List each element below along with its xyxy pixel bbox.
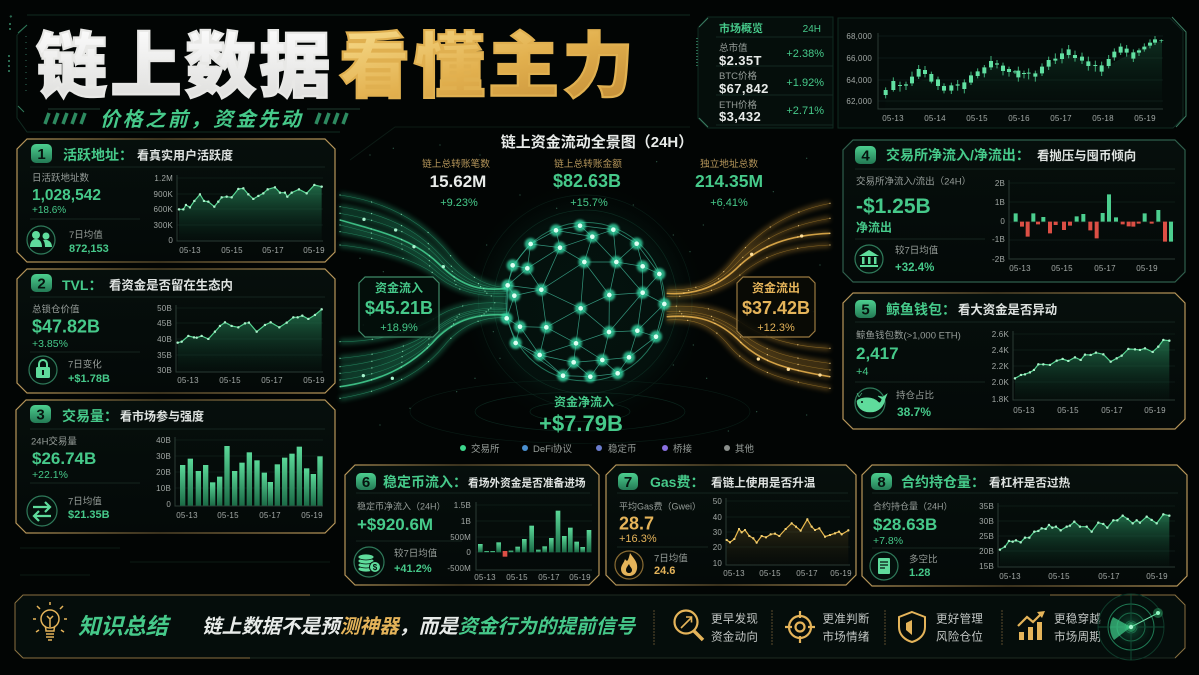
heading 6: 看场外资金是否准备进场 <box>468 476 586 490</box>
benefit 1 text <box>711 612 758 644</box>
candlestick axis labels: 66,000 <box>846 54 872 63</box>
callout: capital inflow <box>359 277 439 337</box>
line chart: daily active addresses: 05-19 <box>303 246 325 255</box>
bar chart: stablecoin flow: 05-15 <box>506 573 528 582</box>
7-day change 2: 7日变化 <box>68 358 102 370</box>
candlestick axis labels: 64,000 <box>846 76 872 85</box>
heading 5 <box>855 300 1057 318</box>
line chart: open interest: 05-15 <box>1048 572 1070 581</box>
net inflow <box>539 394 623 436</box>
line chart: open interest: 05-13 <box>999 572 1021 581</box>
7-day average 1: 872,153 <box>69 243 109 255</box>
icon: light bulb <box>33 602 67 640</box>
benefit 3 text: 风险仓位 <box>936 630 983 644</box>
7-day comparison 6: +41.2% <box>394 563 432 575</box>
main metric 5 <box>856 330 961 378</box>
title: 链上数据 <box>36 28 334 107</box>
heading 2 <box>31 274 233 293</box>
legend: 交易所 <box>471 443 500 455</box>
line chart: daily active addresses: 0 <box>168 236 173 245</box>
legend <box>460 443 754 455</box>
benefit 2 text: 更准判断 <box>822 612 870 626</box>
long-short ratio 8 <box>909 554 938 579</box>
main metric 8: $28.63B <box>873 515 937 534</box>
icon: bank <box>855 245 883 273</box>
holding share 5: 持仓占比 <box>896 390 934 402</box>
panel 4: exchange net flow <box>843 140 1185 282</box>
line chart: daily active addresses: 05-17 <box>262 246 284 255</box>
stat: total transfers: +9.23% <box>440 197 478 209</box>
line chart: open interest: 05-17 <box>1098 572 1120 581</box>
line chart: open interest: 35B <box>979 502 994 511</box>
line chart: whale wallets: 05-19 <box>1144 406 1166 415</box>
market overview heading <box>719 21 821 35</box>
7-day average 7 <box>654 552 688 577</box>
bar chart: stablecoin flow: 05-19 <box>569 573 591 582</box>
7-day comparison 4: +32.4% <box>895 262 934 274</box>
bar chart: exchange net flow: 05-19 <box>1136 264 1158 273</box>
candlestick axis labels: 05-15 <box>966 114 988 123</box>
candlestick axis labels: 05-18 <box>1092 114 1114 123</box>
main metric 7: +16.3% <box>619 533 657 545</box>
line chart: whale wallets: 2.2K <box>992 362 1009 371</box>
bar chart: stablecoin flow: 1B <box>461 517 471 526</box>
candlestick axis labels: 05-17 <box>1050 114 1072 123</box>
line chart: daily active addresses <box>154 174 325 255</box>
bar chart: stablecoin flow: 05-13 <box>474 573 496 582</box>
icon: flame <box>615 551 643 579</box>
7-day average 3: 7日均值 <box>68 496 102 508</box>
icon: users <box>27 226 55 254</box>
panel 2: TVL <box>17 269 335 393</box>
stat: total transfer value: 链上总转账金额 <box>554 157 622 170</box>
heading 3: 交易量： <box>62 408 118 424</box>
heading 3 <box>30 405 204 424</box>
stat: total market cap <box>719 42 824 68</box>
heading 5: 5 <box>861 302 870 318</box>
stat: unique addresses <box>695 157 763 209</box>
summary sentence: 链上数据不是预测神器，而是资金行为的提前信号 <box>202 616 636 638</box>
bar chart: exchange net flow: 05-15 <box>1051 264 1073 273</box>
7-day average 1: 7日均值 <box>69 229 103 241</box>
benefit 4 text <box>1054 612 1101 644</box>
line chart: whale wallets: 05-13 <box>1013 406 1035 415</box>
network sphere <box>506 222 665 381</box>
stat: unique addresses: 214.35M <box>695 171 763 191</box>
line chart: open interest <box>979 502 1175 581</box>
bar chart: exchange net flow: 0 <box>1000 217 1005 226</box>
legend: 其他 <box>735 443 754 455</box>
line chart: TVL <box>157 304 325 385</box>
stat: total transfers <box>422 157 490 209</box>
line chart: open interest: 15B <box>979 562 994 571</box>
7-day average 7: 24.6 <box>654 565 675 577</box>
legend: 桥接 <box>673 443 692 455</box>
heading 7: 看链上使用是否升温 <box>711 476 816 490</box>
stat: total market cap: 总市值 <box>719 42 748 54</box>
panel 5: whale wallets <box>843 293 1185 429</box>
line chart: TVL: 50B <box>157 304 172 313</box>
header frame with title and tagline <box>9 15 690 132</box>
summary label: 知识总结 <box>78 614 172 639</box>
line chart: gas fee: 20 <box>713 543 722 552</box>
bar chart: volume: 20B <box>156 468 171 477</box>
stat: unique addresses: +6.41% <box>710 197 748 209</box>
stat: total transfers: 15.62M <box>430 172 486 191</box>
icon: lock <box>29 356 57 384</box>
stat: total transfer value: +15.7% <box>570 197 608 209</box>
bar chart: exchange net flow: -1B <box>992 235 1005 244</box>
line chart: daily active addresses: 600K <box>154 205 173 214</box>
stat: total transfer value: $82.63B <box>553 171 621 191</box>
line chart: gas fee: 05-17 <box>796 569 818 578</box>
heading 3: 看市场参与强度 <box>120 408 204 424</box>
line chart: TVL: 05-17 <box>261 376 283 385</box>
stat: ETH price: ETH价格 <box>719 99 758 111</box>
main metric 5: 鲸鱼钱包数(>1,000 ETH) <box>856 330 961 342</box>
7-day comparison 6 <box>394 548 438 575</box>
candlestick axis labels: 05-13 <box>882 114 904 123</box>
bar chart: exchange net flow <box>992 179 1175 273</box>
line chart: daily active addresses: 900K <box>154 190 173 199</box>
heading 4: 4 <box>861 148 870 164</box>
heading 4: 交易所净流入/净流出： <box>886 147 1030 163</box>
heading 8: 看杠杆是否过热 <box>989 476 1071 490</box>
benefit 1 text: 资金动向 <box>711 630 758 644</box>
icon: rising bars <box>1018 611 1045 640</box>
callout: capital inflow: +18.9% <box>380 322 418 334</box>
callout: capital inflow: 资金流入 <box>375 280 423 295</box>
candlesticks <box>886 36 1162 108</box>
heading 8 <box>871 473 1071 491</box>
net inflow: 资金净流入 <box>554 394 614 409</box>
icon: stablecoins <box>354 547 384 577</box>
line chart: TVL: 05-13 <box>177 376 199 385</box>
main metric 2: $47.82B <box>32 316 100 336</box>
line chart: gas fee: 05-15 <box>759 569 781 578</box>
stat: total transfers: 链上总转账笔数 <box>422 157 490 170</box>
heading 3: 3 <box>36 406 45 424</box>
bar chart: stablecoin flow: 500M <box>450 533 471 542</box>
panel 7: gas fee <box>606 465 856 585</box>
panel 1: active addresses <box>17 139 335 262</box>
tagline <box>45 108 360 131</box>
callout: capital outflow: +12.3% <box>757 322 795 334</box>
main metric 8 <box>873 500 953 547</box>
heading 6: 稳定币流入： <box>383 474 467 490</box>
bar chart: volume: 30B <box>156 452 171 461</box>
stat: ETH price: +2.71% <box>786 105 824 117</box>
benefit 1 text: 更早发现 <box>711 612 758 626</box>
line chart: whale wallets: 1.8K <box>992 395 1009 404</box>
holding share 5 <box>896 390 934 419</box>
7-day average 3: $21.35B <box>68 509 110 521</box>
icon: shield <box>899 612 925 642</box>
bar chart: exchange net flow: 05-13 <box>1009 264 1031 273</box>
callout: capital outflow <box>737 277 815 337</box>
line chart: TVL: 45B <box>157 319 172 328</box>
line chart: open interest: 30B <box>979 517 994 526</box>
main metric 4 <box>856 176 971 234</box>
icon: swap arrows <box>27 496 57 526</box>
line chart: open interest: 05-19 <box>1146 572 1168 581</box>
bar chart: volume: 05-13 <box>176 511 198 520</box>
bar chart: stablecoin flow: 0 <box>466 548 471 557</box>
line chart: TVL: 05-15 <box>219 376 241 385</box>
candlestick axis labels <box>846 32 1156 123</box>
main metric 7 <box>619 500 701 545</box>
main metric 6: +$920.6M <box>357 515 433 534</box>
heading 1: 活跃地址： <box>63 147 133 163</box>
main metric 4: 净流出 <box>856 220 892 234</box>
main metric 6: 稳定币净流入（24H） <box>357 500 446 512</box>
bar chart: volume: 05-15 <box>217 511 239 520</box>
line chart: gas fee: 10 <box>713 559 722 568</box>
callout: capital outflow: $37.42B <box>742 298 810 318</box>
panel 8: open interest <box>862 465 1187 586</box>
line chart: whale wallets: 2.6K <box>992 330 1009 339</box>
stat: total transfer value <box>553 157 622 209</box>
line chart: gas fee: 05-19 <box>830 569 852 578</box>
long-short ratio 8: 多空比 <box>909 554 938 566</box>
market overview heading: 市场概览 <box>719 21 763 35</box>
bar chart: volume: 05-19 <box>301 511 323 520</box>
callout: capital outflow: 资金流出 <box>752 280 800 295</box>
market overview heading: 24H <box>803 24 821 35</box>
icon: whale <box>855 388 887 418</box>
panel: on-chain fund flow overview <box>340 127 830 455</box>
candlestick axis labels: 05-14 <box>924 114 946 123</box>
line chart: whale wallets <box>992 330 1175 415</box>
line chart: gas fee: 05-13 <box>723 569 745 578</box>
7-day change 2: +$1.78B <box>68 373 110 385</box>
main metric 4: 交易所净流入/流出（24H） <box>856 176 971 188</box>
main metric 2: +3.85% <box>32 338 68 350</box>
bar chart: volume <box>156 436 323 520</box>
candlestick axis labels: 62,000 <box>846 97 872 106</box>
main metric 1: 1,028,542 <box>32 187 101 204</box>
panel 3: trading volume <box>16 400 335 533</box>
bar chart: volume: 05-17 <box>259 511 281 520</box>
heading 6: 6 <box>362 474 370 491</box>
icon: target <box>785 611 815 643</box>
line chart: daily active addresses: 1.2M <box>154 174 173 183</box>
line chart: open interest: 20B <box>979 547 994 556</box>
line chart: TVL: 05-19 <box>303 376 325 385</box>
stat: ETH price: $3,432 <box>719 109 761 124</box>
line chart: daily active addresses: 05-15 <box>221 246 243 255</box>
7-day change 2 <box>68 358 110 385</box>
main metric 1 <box>32 172 101 216</box>
line chart: open interest: 25B <box>979 532 994 541</box>
stat: total market cap: $2.35T <box>719 53 762 68</box>
legend: 稳定币 <box>608 443 637 455</box>
heading 1 <box>31 144 233 163</box>
line chart: TVL: 40B <box>157 335 172 344</box>
bar chart: exchange net flow: 05-17 <box>1094 264 1116 273</box>
net inflow: +$7.79B <box>539 411 623 436</box>
panel: knowledge summary <box>15 594 1185 660</box>
legend: DeFi协议 <box>533 443 573 455</box>
tagline: 价格之前，资金先动 <box>100 108 304 131</box>
line chart: gas fee: 40 <box>713 513 722 522</box>
stat: total market cap: +2.38% <box>786 48 824 60</box>
benefit 2 text: 市场情绪 <box>822 630 870 644</box>
line chart: daily active addresses: 05-13 <box>179 246 201 255</box>
holding share 5: 38.7% <box>897 405 931 419</box>
line chart: whale wallets: 2.4K <box>992 346 1009 355</box>
main metric 3: $26.74B <box>32 449 96 468</box>
main metric 2: 总锁仓价值 <box>32 304 80 316</box>
7-day average 1 <box>69 229 109 255</box>
bar chart: stablecoin flow: 1.5B <box>454 501 471 510</box>
7-day average 7: 7日均值 <box>654 552 688 564</box>
icon: radar <box>1098 594 1164 660</box>
bar chart: volume: 10B <box>156 484 171 493</box>
bar chart: exchange net flow: -2B <box>992 255 1005 264</box>
panel: BTC candlestick chart <box>838 17 1186 128</box>
heading 7: Gas费： <box>650 474 704 490</box>
main metric 5: +4 <box>856 366 869 378</box>
heading 7: 7 <box>624 474 632 491</box>
line chart: daily active addresses: 300K <box>154 221 173 230</box>
heading 7 <box>618 473 816 491</box>
heading 5: 看大资金是否异动 <box>958 302 1057 317</box>
title <box>36 28 637 107</box>
candlestick axis labels: 68,000 <box>846 32 872 41</box>
heading 2: TVL： <box>62 277 102 293</box>
line chart: whale wallets: 05-15 <box>1057 406 1079 415</box>
heading 2: 2 <box>37 276 46 292</box>
heading 4: 看抛压与囤币倾向 <box>1037 148 1136 163</box>
bar chart: volume: 40B <box>156 436 171 445</box>
bar chart: exchange net flow: 1B <box>995 198 1005 207</box>
main metric 2 <box>32 304 100 350</box>
title: 看懂主力 <box>339 28 637 107</box>
main metric 3: +22.1% <box>32 469 68 481</box>
bar chart: stablecoin flow <box>447 501 592 582</box>
stat: BTC price: $67,842 <box>719 81 769 96</box>
line chart: whale wallets: 2.0K <box>992 378 1009 387</box>
main metric 3: 24H交易量 <box>31 436 77 448</box>
7-day comparison 4 <box>895 244 939 274</box>
line chart: gas fee: 50 <box>713 497 722 506</box>
main metric 1: 日活跃地址数 <box>32 172 90 184</box>
heading 1: 看真实用户活跃度 <box>137 148 233 162</box>
main metric 1: +18.6% <box>32 205 66 216</box>
benefit 4 text: 更稳穿越 <box>1054 612 1101 626</box>
candlestick axis labels: 05-19 <box>1134 114 1156 123</box>
main metric 5: 2,417 <box>856 344 899 363</box>
heading 1: 1 <box>37 146 46 163</box>
bar chart: volume: 0 <box>166 500 171 509</box>
bar chart: stablecoin flow: 05-17 <box>538 573 560 582</box>
stat: BTC price: +1.92% <box>786 77 824 89</box>
heading 8: 合约持仓量： <box>901 474 985 490</box>
bar chart: stablecoin flow: -500M <box>447 564 471 573</box>
icon: contract document <box>870 552 898 580</box>
stat: BTC price <box>719 70 824 96</box>
heading 2: 看资金是否留在生态内 <box>109 278 233 292</box>
line chart: TVL: 30B <box>157 366 172 375</box>
main metric 8: 合约持仓量（24H） <box>873 500 953 512</box>
benefit 2 text <box>822 612 870 644</box>
heading 4 <box>855 146 1136 164</box>
panel 6: stablecoin inflow <box>345 465 599 585</box>
candlestick axis labels: 05-16 <box>1008 114 1030 123</box>
7-day comparison 4: 较7日均值 <box>895 244 939 256</box>
7-day average 3 <box>68 496 110 521</box>
main metric 8: +7.8% <box>873 535 903 547</box>
heading 5: 鲸鱼钱包： <box>886 302 956 318</box>
bar chart: exchange net flow: 2B <box>995 179 1005 188</box>
heading 8: 8 <box>877 474 886 491</box>
line chart: gas fee: 30 <box>713 528 722 537</box>
7-day comparison 6: 较7日均值 <box>394 548 438 560</box>
stat: unique addresses: 独立地址总数 <box>700 157 758 170</box>
main metric 3 <box>31 436 96 481</box>
benefit 4 text: 市场周期 <box>1054 630 1101 644</box>
line chart: gas fee <box>713 497 852 578</box>
line chart: whale wallets: 05-17 <box>1101 406 1123 415</box>
stat: ETH price <box>719 99 824 124</box>
heading 6 <box>356 473 586 491</box>
main metric 6 <box>357 500 446 534</box>
line chart: TVL: 35B <box>157 351 172 360</box>
stat: BTC price: BTC价格 <box>719 70 758 82</box>
main metric 4: -$1.25B <box>856 195 931 218</box>
icon: magnifier <box>674 610 703 640</box>
benefit 3 text <box>936 612 983 644</box>
main metric 7: 28.7 <box>619 514 654 534</box>
icon: stablecoins: $ <box>373 563 378 572</box>
panel: market overview <box>697 17 833 128</box>
long-short ratio 8: 1.28 <box>909 567 930 579</box>
benefit 3 text: 更好管理 <box>936 612 983 626</box>
main metric 7: 平均Gas费（Gwei） <box>619 500 701 512</box>
flow heading: 链上资金流动全景图（24H） <box>501 133 693 151</box>
callout: capital inflow: $45.21B <box>365 298 433 318</box>
fund flow streams and sphere <box>340 145 830 443</box>
